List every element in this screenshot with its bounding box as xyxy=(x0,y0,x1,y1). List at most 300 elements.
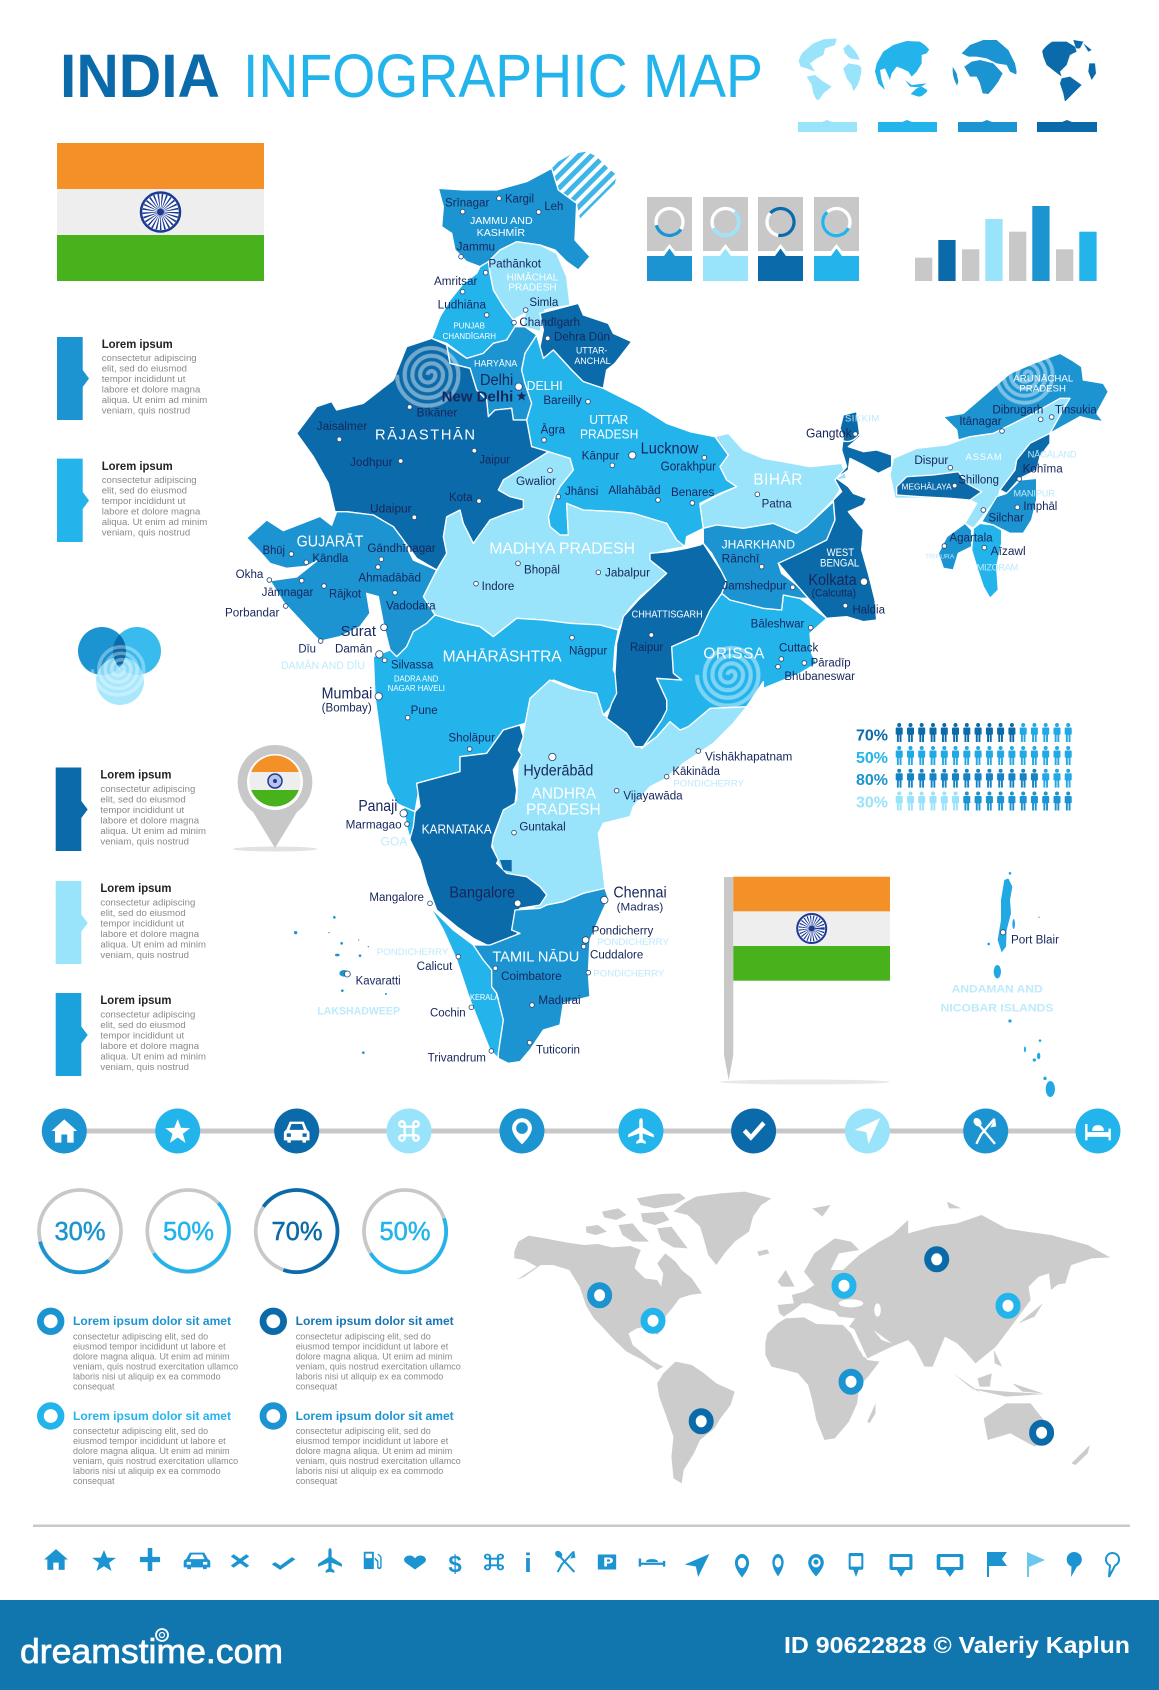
city name labels: Haldia xyxy=(852,602,885,616)
text block 3: aliqua. Ut enim ad minim xyxy=(100,826,206,837)
city name labels: Bhūj xyxy=(263,543,285,557)
city name labels: Jāmnagar xyxy=(262,585,313,599)
city name labels: Cuttack xyxy=(779,641,819,655)
legend item 1 xyxy=(40,1311,238,1391)
globe base bars xyxy=(798,120,1097,132)
globes row xyxy=(798,38,1097,132)
city name labels: Bhopāl xyxy=(524,562,560,576)
state: Andhra enclave xyxy=(500,860,512,872)
icon: home xyxy=(42,1108,87,1154)
state: West Bengal xyxy=(778,412,892,622)
city name labels: Allahābād xyxy=(608,483,661,497)
text block 4: aliqua. Ut enim ad minim xyxy=(100,940,206,950)
text block 1: tempor incididunt ut xyxy=(102,374,186,385)
icon: location pin xyxy=(500,1108,544,1154)
city name labels: Vadodara xyxy=(386,598,436,612)
state: Assam xyxy=(890,398,1070,528)
state name labels: CHANDĪGARH xyxy=(443,331,496,341)
icon: fork and knife xyxy=(963,1108,1008,1154)
state name labels: BIHĀR xyxy=(753,471,802,488)
world map xyxy=(514,1192,1110,1483)
title xyxy=(60,42,763,110)
state name labels: PUNJAB xyxy=(453,320,485,330)
card 2 xyxy=(703,197,748,281)
city name labels: Silchar xyxy=(988,511,1024,525)
legend item 1: eiusmod tempor incididunt ut labore et xyxy=(73,1341,226,1351)
state name labels: SIKKIM xyxy=(845,414,879,424)
text block 2: consectetur adipiscing xyxy=(102,475,197,486)
city name labels: Gāndhīnagar xyxy=(367,541,436,555)
legend item 1: Lorem ipsum dolor sit amet xyxy=(73,1314,231,1328)
city name labels: Itānagar xyxy=(959,414,1002,428)
city name labels: (Bombay) xyxy=(322,701,372,715)
people row 1 xyxy=(896,723,1072,742)
city name labels: Coimbatore xyxy=(501,969,562,983)
city name labels: Benares xyxy=(671,485,714,499)
city name labels: Ahmadābād xyxy=(358,571,421,585)
bottom divider xyxy=(33,1524,1130,1527)
city name labels: Bāleshwar xyxy=(751,617,804,631)
state name labels: GOA xyxy=(381,835,407,849)
donut 30%: 30% xyxy=(54,1216,106,1246)
icon timeline xyxy=(42,1108,1120,1154)
legend item 3: veniam, quis nostrud exercitation ullamco xyxy=(73,1456,238,1466)
city name labels: Nāgpur xyxy=(569,643,607,657)
city name labels: Sūrat xyxy=(341,624,376,640)
state name labels: UTTAR xyxy=(589,413,628,427)
text block 4: consectetur adipiscing xyxy=(100,898,195,908)
legend item 2: veniam, quis nostrud exercitation ullamco xyxy=(296,1361,461,1371)
city name labels: Tinsukia xyxy=(1055,402,1097,416)
donut 50% second: 50% xyxy=(380,1216,430,1246)
donut 70% xyxy=(256,1190,338,1272)
text block 2: labore et dolore magna xyxy=(102,506,201,518)
icon row: home to parking: $ xyxy=(448,1551,462,1578)
text block 1: veniam, quis nostrud xyxy=(102,406,190,416)
city name labels: Marmagao xyxy=(346,817,402,831)
text block 1: elit, sed do eiusmod xyxy=(102,364,187,374)
state name labels: NICOBAR ISLANDS xyxy=(941,1003,1053,1015)
state name labels: MIZORAM xyxy=(977,563,1018,573)
icon: navigation arrow xyxy=(845,1108,890,1154)
city name labels: Jaisalmer xyxy=(317,419,367,433)
map pin with flag xyxy=(233,745,317,852)
city name labels: Shillong xyxy=(958,472,999,486)
text block 5: tempor incididunt ut xyxy=(100,1030,184,1042)
state: Arunachal Pradesh xyxy=(943,353,1108,440)
state: Karnataka xyxy=(410,725,547,947)
text block 3: Lorem ipsum xyxy=(100,768,171,782)
city name labels: Tuticorin xyxy=(536,1042,580,1056)
city name labels: Āgra xyxy=(541,422,565,436)
text block 1: aliqua. Ut enim ad minim xyxy=(102,395,207,406)
state name labels: PONDICHERRY xyxy=(673,779,745,789)
watermark swirls on map xyxy=(397,348,1053,706)
city name labels: Ludhiāna xyxy=(438,297,486,311)
state name labels: ASSAM xyxy=(966,452,1002,462)
icon: star xyxy=(155,1108,200,1154)
state name labels: ANCHAL xyxy=(574,356,611,366)
row labels: 30% xyxy=(856,795,888,812)
globe: Americas view, dark xyxy=(1042,40,1096,102)
legend item 2: dolore magna aliqua. Ut enim ad minim xyxy=(296,1351,452,1361)
text block 3 xyxy=(56,768,206,851)
state: Uttaranchal xyxy=(540,303,632,388)
city name labels: Dehra Dūn xyxy=(554,330,610,344)
footer bar xyxy=(0,1600,1159,1690)
icon: check xyxy=(731,1108,776,1154)
icon: plane xyxy=(618,1108,664,1154)
city name labels: Chennai xyxy=(613,885,667,902)
legend item 3: laboris nisi ut aliquip ex ea commodo xyxy=(73,1466,221,1476)
icon row: home to parking xyxy=(44,1548,616,1578)
city name labels: Kānpur xyxy=(582,448,619,462)
state: Gujarat xyxy=(247,512,437,657)
text block 5: consectetur adipiscing xyxy=(100,1010,195,1020)
state: Tripura xyxy=(938,523,972,570)
city name labels: Jodhpur xyxy=(350,455,393,469)
state name labels: PONDICHERRY xyxy=(597,937,670,947)
state name labels: WEST xyxy=(827,547,854,559)
state: Jammu and Kashmir xyxy=(438,168,590,270)
city name labels: Trivandrum xyxy=(428,1051,486,1065)
text block 3: veniam, quis nostrud xyxy=(100,836,189,848)
card 1 xyxy=(647,197,692,281)
donut 50% second xyxy=(364,1190,446,1272)
row labels: 70% xyxy=(856,728,888,745)
city name labels: Guntakal xyxy=(519,820,566,834)
state: Haryana xyxy=(447,327,537,420)
city name labels: Kavaratti xyxy=(356,973,401,987)
state: Punjab xyxy=(432,262,515,358)
legend item 1: consequat xyxy=(73,1381,115,1391)
city name labels: Mangalore xyxy=(369,890,424,904)
state: Chhattisgarh xyxy=(607,543,727,747)
city name labels: Lucknow xyxy=(641,440,699,457)
text block 2: aliqua. Ut enim ad minim xyxy=(102,517,207,528)
legend item 2: Lorem ipsum dolor sit amet xyxy=(296,1314,454,1328)
text block 5: labore et dolore magna xyxy=(100,1041,200,1052)
map water details xyxy=(839,1299,892,1358)
state name labels: ANDAMAN AND xyxy=(952,984,1043,996)
people row 4 xyxy=(896,792,1072,810)
legend item 1: dolore magna aliqua. Ut enim ad minim xyxy=(73,1351,230,1361)
state name labels: DAMĀN AND DĪU xyxy=(281,660,365,672)
donut 50% bright xyxy=(147,1190,229,1272)
city name labels: Gwalior xyxy=(516,474,556,488)
legend item 3: eiusmod tempor incididunt ut labore et xyxy=(73,1436,226,1446)
india map xyxy=(225,152,1108,1097)
text block 4: Lorem ipsum xyxy=(100,881,171,895)
state: Mizoram xyxy=(972,523,1002,598)
legend item 4: laboris nisi ut aliquip ex ea commodo xyxy=(296,1466,443,1476)
state: Bihar xyxy=(700,433,847,533)
legend item 3: consectetur adipiscing elit, sed do xyxy=(73,1426,208,1436)
text block 2: tempor incididunt ut xyxy=(102,496,186,507)
legend item 3: consequat xyxy=(73,1476,115,1486)
city name labels: Jhānsi xyxy=(565,484,598,498)
people percentage chart xyxy=(856,723,1072,812)
legend item 4: dolore magna aliqua. Ut enim ad minim xyxy=(296,1446,452,1456)
city name labels: Kāndla xyxy=(312,551,348,565)
state name labels: LAKSHADWEEP xyxy=(317,1005,400,1017)
legend item 4: consectetur adipiscing elit, sed do xyxy=(296,1426,431,1436)
donut 70%: 70% xyxy=(272,1216,322,1246)
state name labels: ANDHRA xyxy=(532,785,597,802)
info cards with rings xyxy=(647,197,859,281)
row labels: 80% xyxy=(856,772,888,789)
legend item 2: consequat xyxy=(296,1381,338,1391)
state name labels: NAGAR HAVELI xyxy=(388,684,445,693)
state name labels: GUJARĀT xyxy=(297,534,364,551)
legend item 4: consequat xyxy=(296,1476,338,1486)
state name labels: MANIPUR xyxy=(1013,489,1055,499)
flag on pole xyxy=(720,877,890,1084)
bottom icon row xyxy=(44,1548,1119,1578)
city markers xyxy=(267,196,1054,1053)
city name labels: Udaipur xyxy=(370,501,412,515)
legend item 4: eiusmod tempor incididunt ut labore et xyxy=(296,1436,449,1446)
state name labels: RĀJASTHĀN xyxy=(375,427,475,443)
text block 4: veniam, quis nostrud xyxy=(100,950,189,961)
city name labels: Chandīgarh xyxy=(519,315,580,329)
row labels xyxy=(856,728,888,812)
text block 4 xyxy=(56,881,206,964)
legend item 4: veniam, quis nostrud exercitation ullamco xyxy=(296,1456,461,1466)
icon: car xyxy=(274,1108,319,1154)
state name labels: BENGAL xyxy=(820,558,859,570)
state: Rajasthan xyxy=(297,338,548,570)
city name labels: Raipur xyxy=(630,640,663,654)
state: Meghalaya xyxy=(897,472,982,500)
state: Tamil Nadu xyxy=(473,888,608,1063)
state name labels: JHARKHAND xyxy=(722,537,795,551)
city name labels: Vishākhapatnam xyxy=(705,750,792,764)
legend item 2 xyxy=(263,1311,461,1391)
text block 2 xyxy=(57,459,207,542)
city name labels: Bhubaneswar xyxy=(784,669,855,683)
text block 2: elit, sed do eiusmod xyxy=(102,486,187,496)
city name labels: Dibrugarh xyxy=(992,402,1043,416)
city name labels: Jammu xyxy=(457,240,495,254)
text block 4: labore et dolore magna xyxy=(100,929,200,940)
row labels: 50% xyxy=(856,750,888,767)
bar chart xyxy=(915,206,1097,281)
state name labels: PONDICHERRY xyxy=(593,969,665,979)
state: Jharkhand xyxy=(703,502,835,610)
icon: bed xyxy=(1076,1108,1120,1154)
city name labels: Damān xyxy=(335,641,372,655)
legend item 3: dolore magna aliqua. Ut enim ad minim xyxy=(73,1446,230,1456)
New Delhi star xyxy=(517,391,527,401)
city name labels xyxy=(225,191,1097,1065)
legend item 1: veniam, quis nostrud exercitation ullamco xyxy=(73,1361,238,1371)
state: Kerala xyxy=(430,907,503,1058)
state: Maharashtra xyxy=(373,615,623,812)
city name labels: Okha xyxy=(236,567,263,581)
state name labels: JAMMU AND xyxy=(470,216,533,227)
state name labels: TRIPURA xyxy=(925,553,955,560)
city name labels: Leh xyxy=(544,199,563,213)
text block 2: Lorem ipsum xyxy=(102,459,173,473)
text block 1: consectetur adipiscing xyxy=(102,353,197,364)
legend item 2: eiusmod tempor incididunt ut labore et xyxy=(296,1341,449,1351)
text block 4: tempor incididunt ut xyxy=(100,918,184,930)
text block 5 xyxy=(56,993,206,1076)
city name labels: Indore xyxy=(482,579,514,593)
donut 30% xyxy=(39,1190,121,1272)
state name labels: TAMIL NĀDU xyxy=(492,950,579,966)
city name labels: Agartala xyxy=(949,531,993,545)
city name labels: Cochin xyxy=(430,1006,466,1020)
state: Orissa xyxy=(643,593,827,747)
city name labels: Pondicherry xyxy=(592,923,654,937)
city name labels: Silvassa xyxy=(391,657,433,671)
city name labels: New Delhi xyxy=(442,390,513,406)
text block 5: veniam, quis nostrud xyxy=(100,1062,189,1073)
city name labels: Jabalpur xyxy=(605,566,650,580)
city name labels: Srīnagar xyxy=(445,196,489,210)
city name labels: Kākināda xyxy=(672,764,720,778)
state name labels: KASHMĪR xyxy=(477,227,525,239)
city name labels: (Madras) xyxy=(617,902,664,914)
city name labels: Dispur xyxy=(914,453,948,467)
state name labels: PRADESH xyxy=(580,427,638,441)
state name labels xyxy=(281,216,1077,1017)
city name labels: Madurai xyxy=(538,993,581,1007)
city name labels: Mumbai xyxy=(322,685,372,702)
city name labels: Port Blair xyxy=(1011,932,1059,946)
city name labels: Jamshedpur xyxy=(722,578,787,592)
text block 1: Lorem ipsum xyxy=(102,337,173,351)
state name labels: KERALA xyxy=(470,993,500,1002)
city name labels: Jaipur xyxy=(479,452,510,466)
text block 4: elit, sed do eiusmod xyxy=(100,908,186,919)
city name labels: Pathānkot xyxy=(488,257,542,271)
text block 3: consectetur adipiscing xyxy=(100,784,195,795)
state: Uttar Pradesh xyxy=(522,335,737,547)
city name labels: Imphāl xyxy=(1023,499,1057,513)
state name labels: PRADESH xyxy=(508,283,557,294)
state name labels: MEGHĀLAYA xyxy=(902,482,952,491)
footer credit: ID 90622828 © Valeriy Kaplun xyxy=(784,1632,1130,1658)
state name labels: DADRA AND xyxy=(394,675,439,684)
text block 3: elit, sed do eiusmod xyxy=(100,794,186,806)
city name labels: Kargil xyxy=(505,191,534,205)
icon row: home to parking: i xyxy=(524,1548,532,1578)
state name labels: NĀGĀLAND xyxy=(1028,449,1077,459)
globe: Atlantic view, light xyxy=(798,38,862,102)
city name labels: Dīu xyxy=(298,641,316,655)
icon: command xyxy=(386,1108,432,1154)
disputed hatched area xyxy=(552,152,617,218)
state name labels: HIMĀCHAL xyxy=(507,272,559,284)
state: Goa xyxy=(403,807,415,838)
map markers xyxy=(591,1250,1051,1442)
state name labels: HARYĀNA xyxy=(474,359,517,369)
state: Andhra Pradesh xyxy=(492,680,747,913)
city name labels: Delhi xyxy=(480,372,513,389)
text block 5: aliqua. Ut enim ad minim xyxy=(100,1052,206,1062)
state name labels: MAHĀRĀSHTRA xyxy=(443,649,562,666)
text block 5: Lorem ipsum xyxy=(100,993,171,1007)
title: INFOGRAPHIC MAP xyxy=(243,42,763,110)
legend item 2: laboris nisi ut aliquip ex ea commodo xyxy=(296,1371,443,1381)
state name labels: PRADESH xyxy=(526,801,601,818)
text block 1: labore et dolore magna xyxy=(102,384,201,396)
legend item 3: Lorem ipsum dolor sit amet xyxy=(73,1409,231,1423)
card 3 xyxy=(758,197,803,281)
city name labels: Rājkot xyxy=(329,586,362,600)
city name labels: Simla xyxy=(529,295,558,309)
state name labels: PONDICHERRY xyxy=(377,947,449,957)
city name labels: Patna xyxy=(762,496,792,510)
city name labels: Calicut xyxy=(417,959,453,973)
city name labels: Aīzawl xyxy=(991,544,1026,558)
city name labels: Pune xyxy=(411,703,438,717)
text block 3: tempor incididunt ut xyxy=(100,805,184,816)
city name labels: Gorakhpur xyxy=(661,460,716,474)
card 4 xyxy=(814,197,859,281)
city name labels: Porbandar xyxy=(225,605,279,619)
state name labels: DELHI xyxy=(527,379,563,393)
Lakshadweep islands xyxy=(294,916,387,1054)
state name labels: CHHATTISGARH xyxy=(632,609,703,620)
city name labels: Gangtok xyxy=(806,426,852,440)
state name labels: KARNATAKA xyxy=(422,822,492,836)
text block 5: elit, sed do eiusmod xyxy=(100,1020,186,1031)
state name labels: MADHYA PRADESH xyxy=(489,540,635,557)
city name labels: Panaji xyxy=(358,798,397,815)
text block 2: veniam, quis nostrud xyxy=(102,528,190,538)
state: Himachal Pradesh xyxy=(488,242,570,332)
city name labels: Kolkata xyxy=(808,572,857,589)
legend item 4: Lorem ipsum dolor sit amet xyxy=(296,1409,454,1423)
state name labels: UTTAR- xyxy=(576,345,607,355)
flag: India top left xyxy=(57,143,264,281)
state: Madhya Pradesh xyxy=(423,452,685,637)
city name labels: Rānchī xyxy=(722,552,760,566)
footer logo: dreamstime.com xyxy=(20,1633,283,1671)
people row 3 xyxy=(896,769,1072,788)
legend item 4 xyxy=(263,1406,461,1486)
city name labels: Bangalore xyxy=(449,885,515,902)
text block 3: labore et dolore magna xyxy=(100,816,200,826)
globe: Asia view, bright xyxy=(875,41,930,97)
title: INDIA xyxy=(60,42,220,110)
state: Nagaland xyxy=(1000,433,1050,493)
state name labels: ORISSA xyxy=(703,645,765,662)
city name labels: Bīkāner xyxy=(417,406,457,420)
Andaman and Nicobar islands xyxy=(987,872,1055,1097)
legend item 1: laboris nisi ut aliquip ex ea commodo xyxy=(73,1371,221,1381)
city name labels: Kohīma xyxy=(1023,461,1063,475)
icon row: bed to search pin xyxy=(639,1552,1119,1577)
globes clipped to circles xyxy=(798,38,1096,102)
legend item 3 xyxy=(40,1406,238,1486)
legend item 2: consectetur adipiscing elit, sed do xyxy=(296,1331,431,1341)
city name labels: (Calcutta) xyxy=(812,588,856,600)
people row 2 xyxy=(896,746,1072,765)
legend item 1: consectetur adipiscing elit, sed do xyxy=(73,1331,208,1341)
city name labels: Sholāpur xyxy=(448,731,495,745)
city name labels: Kota xyxy=(449,490,473,504)
city name labels: Hyderābād xyxy=(523,763,593,780)
city name labels: Bareilly xyxy=(543,393,582,407)
state name labels: PRADESH xyxy=(1019,384,1066,394)
donut 50% bright: 50% xyxy=(163,1216,214,1246)
city name labels: Vijayawāda xyxy=(623,788,683,802)
